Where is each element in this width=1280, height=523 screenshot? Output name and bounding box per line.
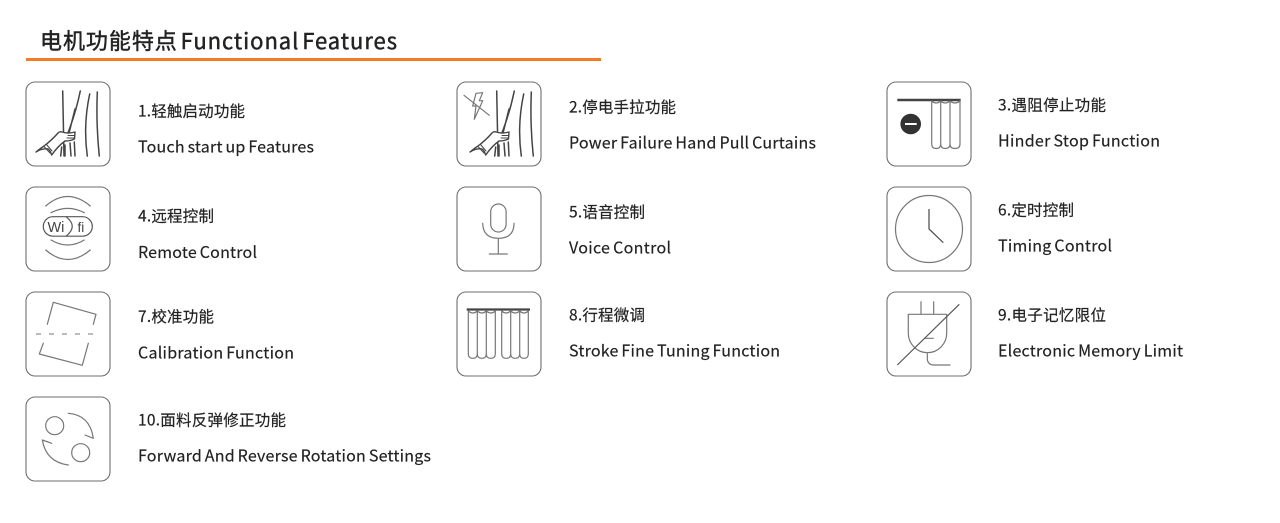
icon: wifi badge	[26, 187, 110, 271]
english label: Voice Control	[569, 234, 671, 258]
english label: Electronic Memory Limit	[998, 338, 1183, 362]
english label: Forward And Reverse Rotation Settings	[138, 442, 431, 466]
chinese label: 7.校准功能	[138, 305, 214, 327]
title underline	[26, 58, 601, 61]
icon: double curtains on rail	[457, 292, 541, 376]
english label: Hinder Stop Function	[998, 128, 1160, 152]
english label: Remote Control	[138, 239, 257, 263]
english label: Stroke Fine Tuning Function	[569, 338, 780, 362]
icon: curtain with stop sign	[887, 82, 971, 166]
title: 电机功能特点 Functional Features	[40, 24, 397, 56]
icon: forward and reverse rotation	[26, 397, 110, 481]
panel: feature 8 stroke fine tuning	[457, 292, 780, 376]
english label: Timing Control	[998, 232, 1112, 256]
panel: feature 5 voice control	[457, 187, 671, 271]
english label: Power Failure Hand Pull Curtains	[569, 130, 816, 154]
panel: feature 3 hinder stop	[887, 82, 1160, 166]
chinese label: 5.语音控制	[569, 200, 645, 222]
chinese label: 8.行程微调	[569, 304, 645, 326]
icon: tilted square split by dashed line	[26, 292, 110, 376]
icon: wifi badge: Wi	[48, 220, 64, 236]
chinese label: 10.面料反弹修正功能	[138, 408, 286, 430]
chinese label: 1.轻触启动功能	[138, 100, 245, 122]
icon: clock	[887, 187, 971, 271]
chinese label: 2.停电手拉功能	[569, 96, 676, 118]
panel: feature 4 remote control	[26, 187, 257, 271]
icon: crossed out plug	[887, 292, 971, 376]
chinese label: 3.遇阻停止功能	[998, 94, 1106, 116]
chinese label: 4.远程控制	[138, 204, 214, 226]
chinese label: 6.定时控制	[998, 198, 1074, 220]
panel: feature 2 power failure hand pull	[457, 82, 816, 166]
panel: feature 10 fabric rebound correction	[26, 397, 431, 481]
panel: feature 9 electronic memory limit	[887, 292, 1183, 376]
chinese label: 9.电子记忆限位	[998, 304, 1106, 326]
icon: wifi badge: fi	[78, 220, 84, 235]
panel: feature 6 timing control	[887, 187, 1112, 271]
icon: microphone	[457, 187, 541, 271]
panel: feature 1 touch start	[26, 82, 314, 166]
icon: hand pulling curtain with no power	[457, 82, 541, 166]
panel: feature 7 calibration	[26, 292, 294, 376]
english label: Touch start up Features	[138, 134, 314, 158]
icon: hand pulling curtain	[26, 82, 110, 166]
english label: Calibration Function	[138, 340, 294, 364]
